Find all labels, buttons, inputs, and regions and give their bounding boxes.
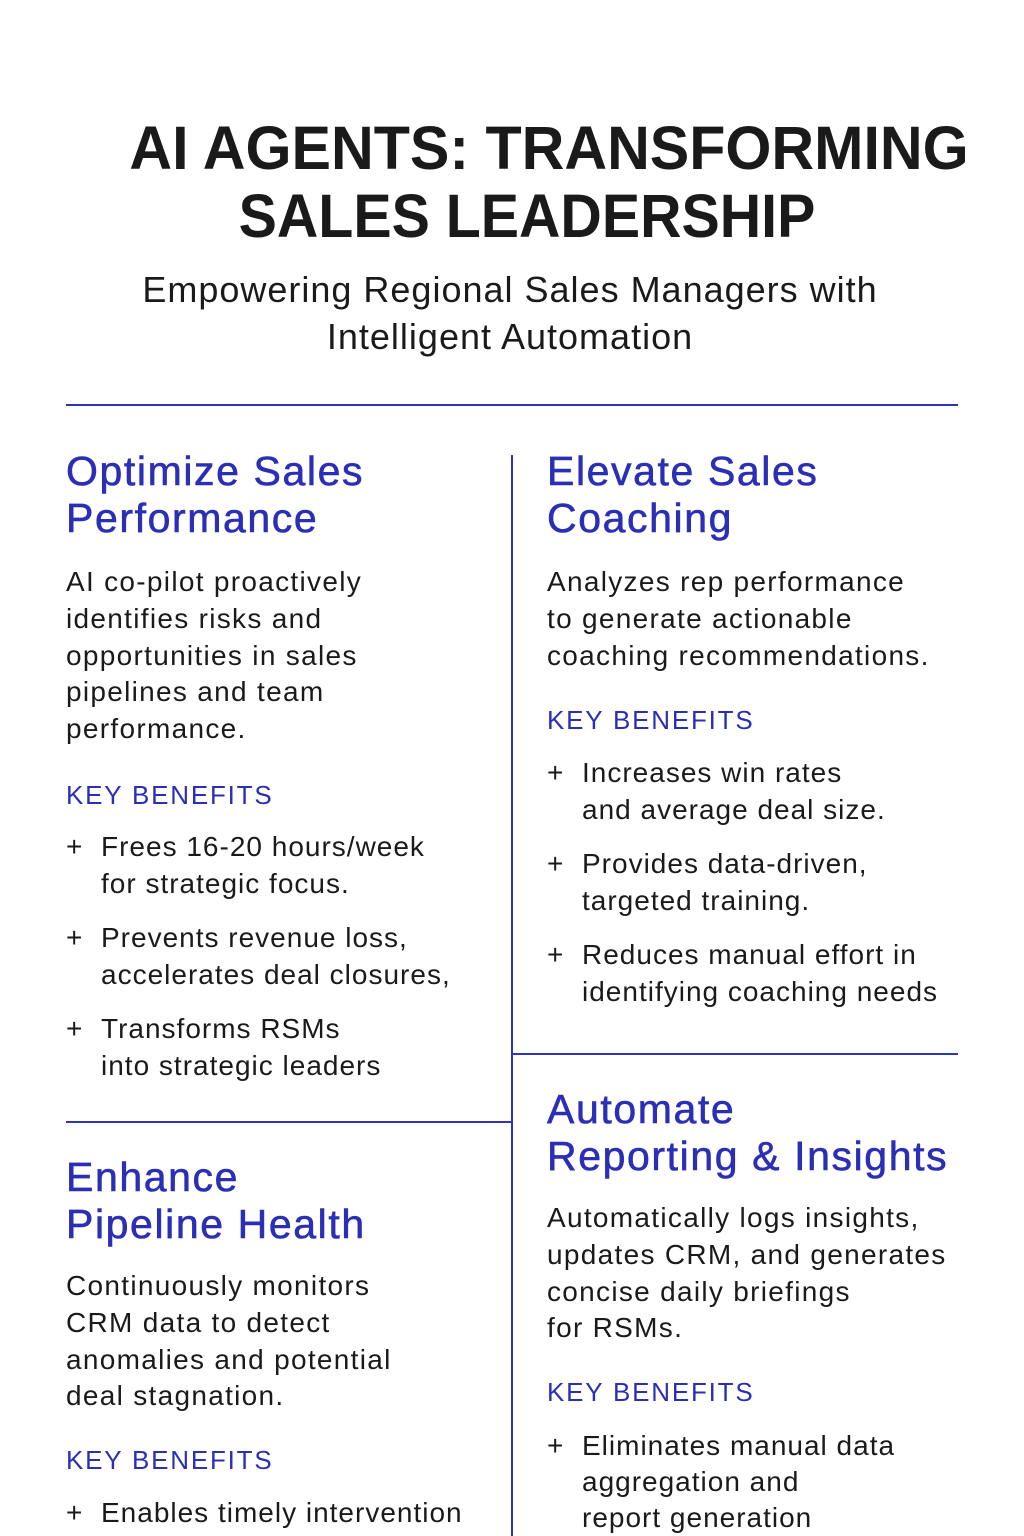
benefit list: report generation xyxy=(582,1502,812,1533)
heading: Automate xyxy=(547,1086,735,1132)
panel: automate reporting xyxy=(546,1086,948,1533)
description xyxy=(547,566,930,671)
heading: Coaching xyxy=(547,495,733,541)
benefit list: into strategic leaders xyxy=(101,1050,381,1081)
benefit list: Transforms RSMs xyxy=(101,1013,341,1044)
benefit list: identifying coaching needs xyxy=(582,976,938,1007)
panel: enhance pipeline health xyxy=(66,1154,463,1528)
heading: Elevate Sales xyxy=(547,448,819,494)
description: to generate actionable xyxy=(547,603,853,634)
benefit list: Increases win rates xyxy=(582,757,842,788)
benefit list: Enables timely intervention xyxy=(101,1497,463,1528)
benefit list: Prevents revenue loss, xyxy=(101,922,408,953)
key benefits label: KEY BENEFITS xyxy=(547,1377,755,1407)
description: Analyzes rep performance xyxy=(547,566,905,597)
heading: Optimize Sales xyxy=(66,448,364,494)
subtitle: Empowering Regional Sales Managers with xyxy=(142,269,878,310)
heading xyxy=(66,1154,366,1247)
benefit list: Frees 16-20 hours/week xyxy=(101,831,425,862)
description: pipelines and team xyxy=(66,676,324,707)
heading xyxy=(547,448,819,541)
title: SALES LEADERSHIP xyxy=(239,182,815,250)
description: for RSMs. xyxy=(547,1312,683,1343)
panel: elevate sales coaching xyxy=(547,448,938,1007)
description: CRM data to detect xyxy=(66,1307,331,1338)
benefit list: Provides data-driven, xyxy=(582,848,868,879)
heading: Reporting & Insights xyxy=(547,1133,948,1179)
heading: Performance xyxy=(66,495,318,541)
description: deal stagnation. xyxy=(66,1380,285,1411)
title xyxy=(129,114,969,250)
key benefits label: KEY BENEFITS xyxy=(66,780,274,810)
benefit list xyxy=(67,831,451,1081)
description xyxy=(66,1270,392,1411)
description: performance. xyxy=(66,713,247,744)
benefit list: and average deal size. xyxy=(582,794,886,825)
benefit list: targeted training. xyxy=(582,885,810,916)
description: anomalies and potential xyxy=(66,1344,392,1375)
description: coaching recommendations. xyxy=(547,640,930,671)
key benefits label: KEY BENEFITS xyxy=(547,705,755,735)
description: concise daily briefings xyxy=(547,1276,851,1307)
benefit list: accelerates deal closures, xyxy=(101,959,451,990)
description: Continuously monitors xyxy=(66,1270,370,1301)
key benefits label: KEY BENEFITS xyxy=(66,1445,274,1475)
heading xyxy=(546,1086,948,1179)
heading: Pipeline Health xyxy=(66,1201,366,1247)
panel: optimize sales performance xyxy=(66,448,451,1081)
benefit list: for strategic focus. xyxy=(101,868,350,899)
description: opportunities in sales xyxy=(66,640,358,671)
description xyxy=(547,1202,947,1343)
benefit list xyxy=(548,1430,895,1533)
description: identifies risks and xyxy=(66,603,322,634)
benefit list: Eliminates manual data xyxy=(582,1430,895,1461)
description: updates CRM, and generates xyxy=(547,1239,947,1270)
description: AI co-pilot proactively xyxy=(66,566,362,597)
description: Automatically logs insights, xyxy=(547,1202,920,1233)
subtitle: Intelligent Automation xyxy=(327,316,693,357)
subtitle xyxy=(142,269,878,357)
benefit list xyxy=(548,757,938,1007)
benefit list: Reduces manual effort in xyxy=(582,939,917,970)
title: AI AGENTS: TRANSFORMING xyxy=(129,114,969,182)
heading: Enhance xyxy=(66,1154,239,1200)
description xyxy=(66,566,362,744)
heading xyxy=(66,448,364,541)
benefit list: aggregation and xyxy=(582,1466,799,1497)
